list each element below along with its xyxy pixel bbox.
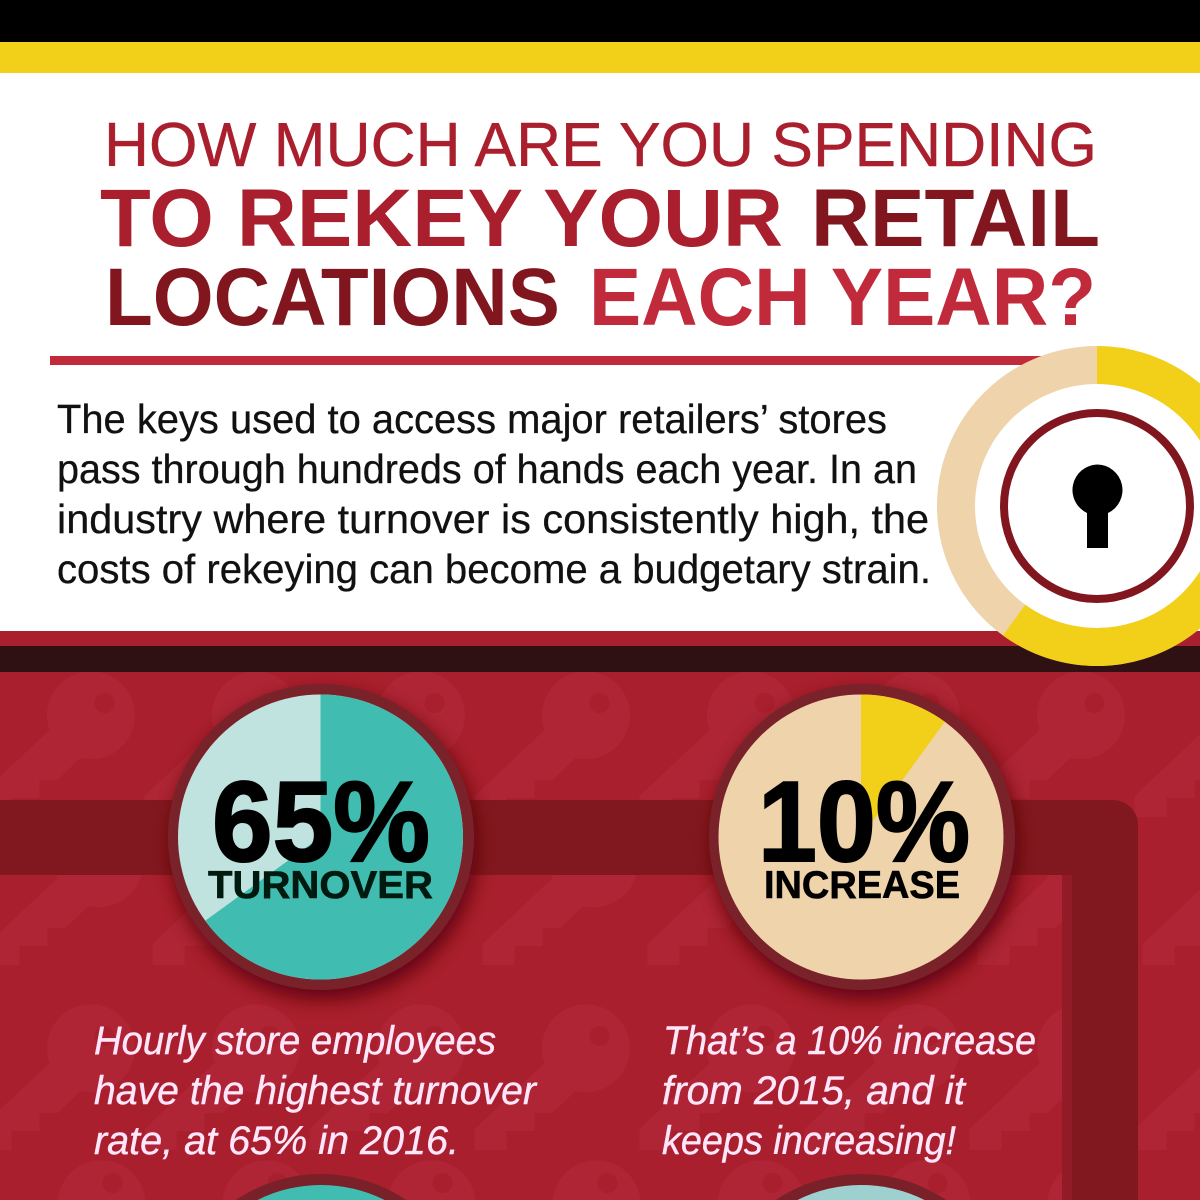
caption: increase [662,1019,1036,1163]
pie base [178,694,463,980]
caption: increase: from 2015, and it [662,1069,967,1113]
caption: turnover: rate, at 65% in 2016. [94,1119,459,1163]
caption: turnover: have the highest turnover [94,1069,538,1113]
connector path bar [0,800,1138,1200]
title line 1: HOW MUCH ARE YOU SPENDING [104,111,1097,180]
title line 2: TO REKEY YOUR [100,173,783,264]
title line 2: RETAIL [811,173,1100,264]
intro paragraph [57,396,931,592]
10% number: 10% [758,759,970,886]
intro paragraph: industry where turnover is consistently high, the [57,496,929,542]
caption: turnover [94,1019,538,1163]
pie base [718,694,1004,980]
key ring icon [937,346,1200,666]
title line 3: LOCATIONS [105,252,560,343]
title line 3 [105,252,1096,343]
increase label: INCREASE [764,864,960,907]
red band under intro [0,631,1200,646]
stat: 65% turnover [168,684,474,990]
red background panel [0,672,1200,1200]
yellow band [0,42,1200,73]
65% number: 65% [212,759,430,886]
turnover label: TURNOVER [208,864,433,907]
caption: increase: That’s a 10% increase [663,1019,1036,1063]
pie ring [168,684,474,990]
caption: increase: keeps increasing! [662,1119,956,1163]
top black band [0,0,1200,42]
stat: 10% increase [709,684,1015,990]
intro paragraph: pass through hundreds of hands each year. In an [57,446,917,492]
intro paragraph: costs of rekeying can become a budgetary strain. [57,546,931,592]
caption: turnover: Hourly store employees [94,1019,496,1063]
title line 3: EACH YEAR? [589,252,1096,343]
pie ring [709,684,1015,990]
next stat circle left [236,1174,406,1200]
intro paragraph: The keys used to access major retailers’ stores [57,396,887,442]
pie slice 10 percent [861,694,945,837]
red divider rule [50,356,1060,365]
next stat circle right [776,1174,946,1200]
dark band [0,646,1200,672]
title line 2 [100,173,1100,264]
key pattern [152,673,1038,1022]
pie slice 65 percent [205,694,463,980]
title [100,111,1100,343]
